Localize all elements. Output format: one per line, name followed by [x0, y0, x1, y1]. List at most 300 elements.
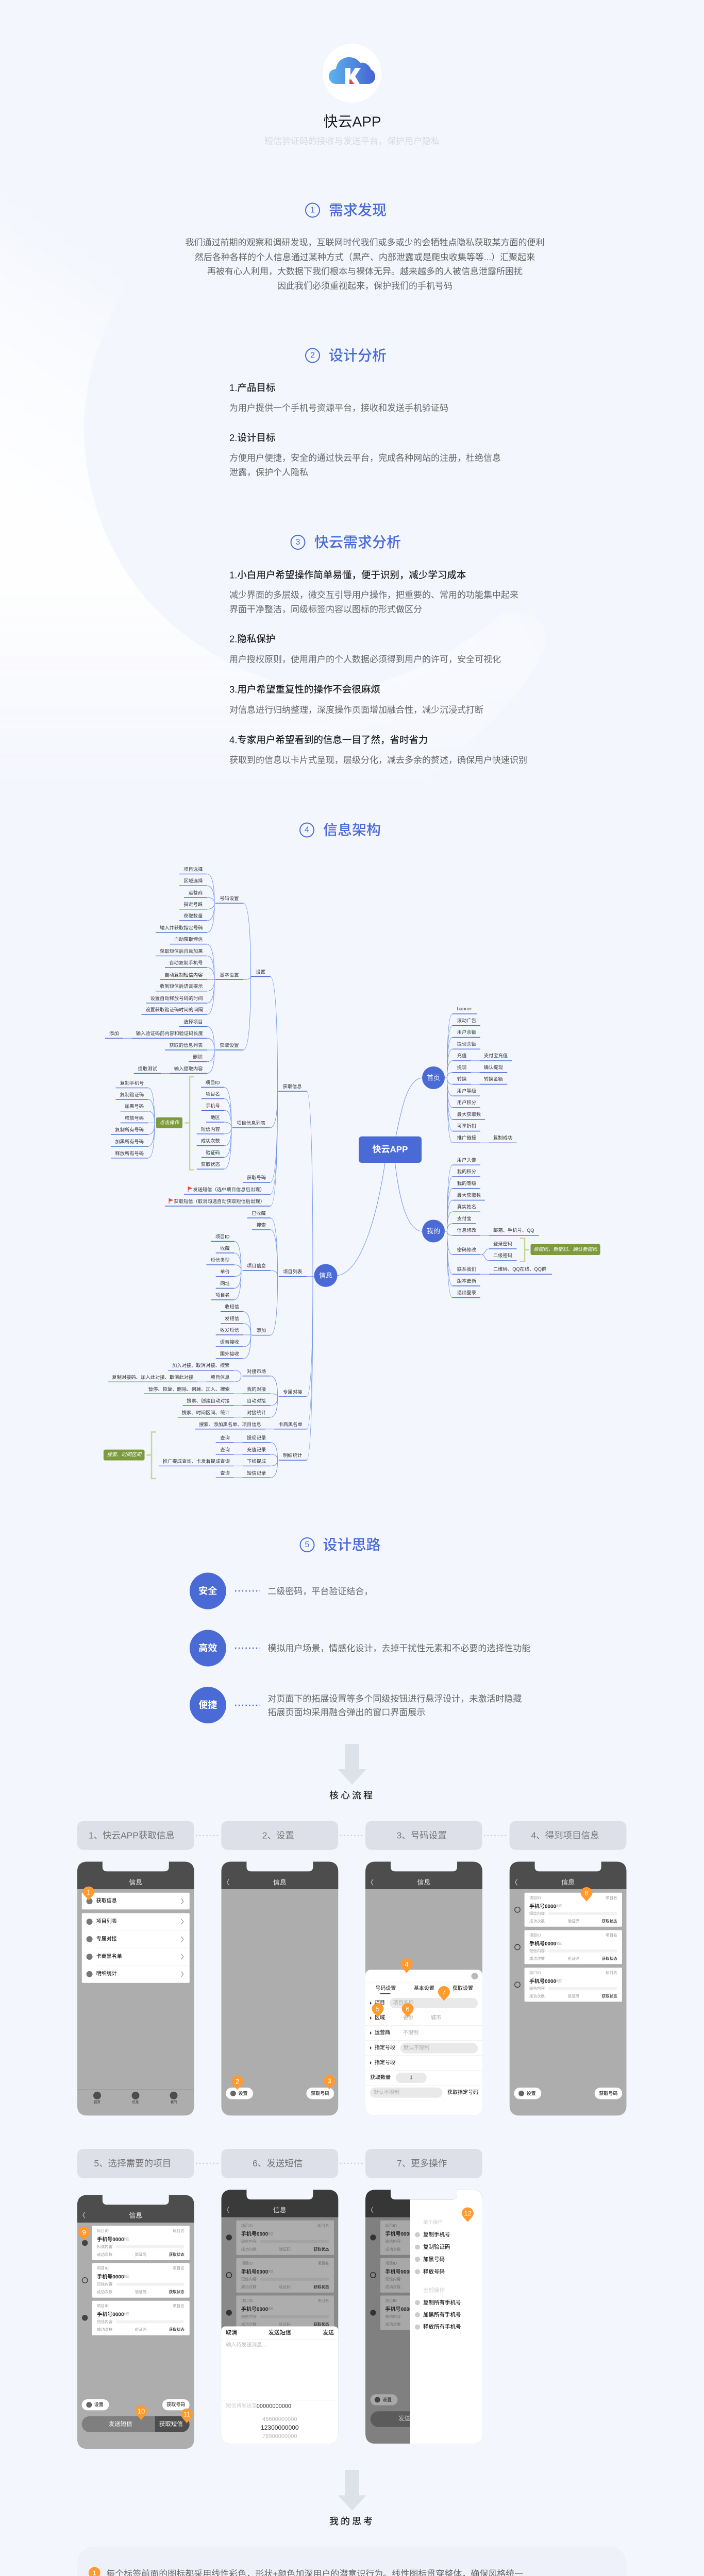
branch: 我的: 退出登录: [457, 1290, 476, 1295]
branch: 首页: 推广链接: [457, 1134, 476, 1140]
need 1: 减少界面的多层级，微交互引导用户操作，把重要的、常用的功能集中起来: [229, 590, 518, 600]
card 1: 手机号0000: [97, 2236, 124, 2243]
card 1: 验证码: [135, 2251, 147, 2257]
card 1: 项目名: [317, 2223, 329, 2228]
card 2: 验证码: [568, 1956, 580, 1961]
branch: 信息: 专属对接: [283, 1389, 302, 1395]
text: 设计目标: [229, 432, 501, 477]
phone 3: 号码设置: 项目: [375, 1999, 385, 2006]
card 2: [236, 2258, 334, 2293]
phone 3: 号码设置: 1: [410, 2075, 413, 2080]
card 2: 验证码: [135, 2289, 147, 2294]
send sheet: 00000000000: [257, 2403, 291, 2410]
section 5: 设计思路: [190, 1537, 530, 1723]
card 2: 成功次数: [385, 2284, 401, 2289]
card 1: 获取状态: [313, 2246, 329, 2251]
paragraph: 再被有心人利用，大数据下我们根本与裸体无异。越来越多的人被信息泄露所困扰: [207, 267, 523, 276]
sub branch: 设置: 获取数量: [183, 913, 203, 919]
sub branch: 项目列表: 项目ID: [215, 1234, 230, 1240]
marker 1: [82, 1887, 95, 1901]
sub branch: 项目列表: 发短信: [225, 1316, 239, 1321]
card 3: 手机号0000: [385, 2306, 412, 2312]
bracket and note: 原密码: [520, 1239, 600, 1261]
card 2: 成功次数: [529, 1956, 545, 1961]
branch: 我的: [422, 1157, 600, 1298]
sub branch: 明细统计: 推广提成查询、卡发着提成查询: [163, 1458, 230, 1464]
card 3: 成功次数: [385, 2321, 401, 2327]
side drawer: 加黑号码: [423, 2256, 445, 2262]
branch: 我的: 邮箱、手机号、QQ: [493, 1227, 534, 1233]
phone 1: 获取信息: 卡商黑名单: [96, 1953, 122, 1959]
sub branch: 设置: 自动复制手机号: [169, 960, 203, 965]
card 3: 短信内容:: [97, 2319, 113, 2324]
marker 1: 1: [87, 1889, 91, 1896]
sub branch: 明细统计: [104, 1432, 278, 1479]
branch: 首页: [422, 1006, 516, 1143]
sub branch: 项目列表: [206, 1210, 278, 1359]
phone 3: 号码设置: [365, 1861, 482, 2115]
card 1: [525, 1893, 622, 1927]
sub branch: 获取信息 children: 获取短信（取消勾选自动获取短信后出现）: [174, 1198, 265, 1204]
item: 高效: 高效: [198, 1642, 217, 1653]
marker 3: [324, 2075, 335, 2090]
sub branch: 明细统计: 查询: [220, 1470, 230, 1476]
card 3: 地区: [267, 2307, 273, 2311]
card 1: 短信内容:: [241, 2239, 258, 2244]
arrow: down to 核心流程: [338, 1744, 366, 1785]
sub branch: 设置: 设置自动释放号码的时间: [150, 995, 203, 1001]
section 3: 快云需求分析: [229, 534, 527, 765]
sub branch: 项目信息列表: 成功次数: [201, 1138, 221, 1144]
phone 1: 获取信息: [77, 1861, 194, 2115]
card 1: 成功次数: [385, 2246, 401, 2251]
branch: 我的: 我的积分: [457, 1168, 476, 1174]
phone 2: 设置: 设置: [238, 2091, 247, 2096]
sub branch: 专属对接 and 卡商黑名单: [108, 1363, 278, 1429]
branch: 首页: 用户积分: [457, 1099, 476, 1105]
item: 安全: [190, 1572, 373, 1609]
need 1: [229, 570, 518, 614]
phone 6: 发送短信: [221, 2190, 338, 2444]
card 1: 手机号0000: [241, 2231, 269, 2238]
sub branch: 专属对接 and 卡商黑名单: 项目信息: [210, 1374, 230, 1380]
item: 安全: 二级密码，平台验证结合，: [267, 1587, 373, 1596]
icon: cloud logo: [323, 44, 381, 103]
card 2: 项目ID: [385, 2261, 397, 2265]
flow steps row 2: [77, 2149, 482, 2178]
branch: 我的: 支付宝: [457, 1215, 472, 1221]
card 3: [236, 2296, 334, 2327]
step 1: 1、快云APP获取信息: [89, 1830, 175, 1840]
sub branch: 设置: 提取测试: [138, 1065, 157, 1072]
need 2: 用户授权原则，使用用户的个人数据必须得到用户的许可，安全可视化: [229, 654, 501, 665]
sub branch: 获取信息 children: [165, 977, 278, 1206]
section 1: 需求发现: [186, 202, 544, 291]
step 4: [510, 1821, 626, 1850]
card 2: 成功次数: [97, 2289, 113, 2294]
sub branch: 项目列表: 搜索: [256, 1222, 266, 1228]
step 5: [77, 2149, 194, 2178]
step 4: 4、得到项目信息: [531, 1830, 599, 1840]
sub branch: 项目信息列表: 释放号码: [125, 1115, 144, 1121]
sub branch: 项目列表: 项目信息: [247, 1263, 266, 1268]
card 3: 项目名: [606, 1970, 617, 1975]
flow steps row 1: [77, 1821, 626, 1850]
card 2: 手机号0000: [97, 2274, 124, 2280]
card 1: 短信内容:: [385, 2239, 402, 2244]
phone 3: 号码设置: 信息: [417, 1878, 431, 1886]
card 1: 手机号0000: [385, 2231, 412, 2238]
sub branch: 项目信息列表: 复制手机号: [120, 1080, 144, 1086]
marker 4: 4: [405, 1960, 409, 1968]
sub branch: 设置: 收到短信后语音提示: [160, 984, 203, 989]
side drawer: 单个操作: [423, 2219, 443, 2225]
card 1: 验证码: [279, 2246, 291, 2251]
card 3: 手机号0000: [529, 1978, 557, 1985]
sub branch: 项目列表: 网址: [220, 1281, 230, 1286]
card 3: 短信内容:: [385, 2314, 402, 2319]
branch: 我的: 真实姓名: [457, 1204, 476, 1210]
sub branch: 明细统计: 查询: [220, 1447, 230, 1452]
card 3: 项目ID: [529, 1970, 541, 1975]
step 5: 5、选择需要的项目: [94, 2158, 171, 2168]
phone 7: 更多操作: 发送短信: [398, 2415, 422, 2422]
card 3: 手机号0000: [97, 2311, 124, 2318]
sub branch: 项目信息列表: 加黑所有号码: [115, 1139, 144, 1144]
sub branch: 项目信息列表: 短信内容: [201, 1126, 220, 1132]
send sheet: 输入待发送消息...: [226, 2342, 266, 2348]
phone 4: 得到项目信息: 设置: [527, 2091, 536, 2096]
heading: 2: [310, 351, 315, 360]
heading: 核心流程: 核心流程: [329, 1790, 375, 1801]
marker 6: [402, 2003, 413, 2018]
item: 便捷: 对页面下的拓展设置等多个同级按钮进行悬浮设计，未激活时隐藏: [267, 1694, 522, 1704]
marker 8: 8: [584, 1889, 589, 1897]
sub branch: 项目信息列表: 释放所有号码: [115, 1150, 144, 1156]
phone 4: 得到项目信息: 信息: [561, 1878, 575, 1886]
phone 3: 号码设置: 默认不限制: [404, 2044, 429, 2051]
phone 1: 获取信息: 项目列表: [96, 1918, 117, 1924]
send sheet: [221, 2327, 338, 2444]
sub branch: 设置: 设置: [256, 970, 265, 975]
branch: 首页: 滚动广告: [457, 1018, 476, 1023]
sub branch: 专属对接 and 卡商黑名单: 我的对接: [247, 1386, 266, 1392]
sub branch: 项目列表: 收发短信: [220, 1327, 239, 1333]
sub branch: 设置: 输入提取内容: [174, 1065, 203, 1072]
card 2: 地区: [267, 2269, 273, 2274]
phone 3: 号码设置: 不限制: [403, 2029, 418, 2036]
step 6: 6、发送短信: [253, 2158, 303, 2168]
bracket and note: 原密码: 原密码、新密码、确认新密码: [533, 1246, 597, 1252]
phone 3: 号码设置: 省份: [403, 2014, 413, 2021]
sub branch: 设置: 自动获取短信: [174, 937, 203, 942]
card 1: 地区: [267, 2232, 273, 2236]
branch: 我的: 我的等级: [457, 1180, 476, 1186]
bracket and note: 搜索、时间区间: 搜索、时间区间: [107, 1452, 142, 1458]
sub branch: 项目信息列表: 项目ID: [206, 1080, 220, 1085]
sub branch: 设置: 指定号段: [183, 902, 203, 907]
sub branch: 项目信息列表: 复制验证码: [120, 1092, 144, 1097]
text: 产品目标: 1.产品目标: [229, 382, 275, 393]
send sheet: 取消: [226, 2329, 237, 2336]
step 2: [221, 1821, 338, 1850]
sub branch: 项目信息列表: 获取状态: [201, 1161, 220, 1167]
sub branch: 设置: 选择项目: [183, 1019, 203, 1024]
branch: 我的: 版本更新: [457, 1278, 476, 1283]
need 1: 界面干净整洁，同级标签内容以图标的形式做区分: [229, 605, 422, 614]
card 3: 短信内容:: [529, 1986, 546, 1991]
marker 12: [462, 2207, 474, 2223]
phone 5: 选择需要的项目: 信息: [129, 2211, 142, 2219]
heading: 需求发现: [329, 202, 387, 218]
marker 3: 3: [327, 2077, 331, 2084]
phone 3: 号码设置: 指定号段: [375, 2044, 395, 2050]
sub branch: 专属对接 and 卡商黑名单: 复制对接码、加入此对接、取消此对接: [112, 1374, 193, 1380]
sub branch: 项目信息列表: 项目信息列表: [237, 1120, 265, 1126]
marker 11: [181, 2409, 193, 2424]
sub branch: 专属对接 and 卡商黑名单: 搜索、时间区间、统计: [182, 1410, 230, 1415]
marker 11: 11: [183, 2410, 190, 2418]
sub branch: 设置: 获取设置: [220, 1043, 239, 1048]
sub branch: 项目列表: 添加: [257, 1328, 266, 1333]
phone 3: 号码设置: 区域: [375, 2014, 385, 2021]
branch: 我的: 最大获取数: [457, 1192, 481, 1198]
branch: 我的: 二级密码: [493, 1252, 512, 1258]
phone 1: 获取信息: 首页: [94, 2099, 101, 2104]
card 2: 成功次数: [241, 2284, 257, 2289]
card 3: 成功次数: [241, 2321, 257, 2327]
side drawer: 加黑所有手机号: [423, 2311, 461, 2318]
card 3: 项目名: [173, 2303, 185, 2308]
paragraph: 然后各种各样的个人信息通过某种方式（黑产、内部泄露或是爬虫收集等等...）汇聚起来: [195, 252, 535, 262]
arrow: down to 我的思考: [338, 2470, 366, 2511]
marker 2: 2: [236, 2077, 239, 2086]
step 3: [365, 1821, 482, 1850]
card 1: 项目ID: [529, 1895, 541, 1900]
item: 便捷: 便捷: [198, 1700, 217, 1710]
sub branch: 项目列表: 国外接收: [220, 1351, 239, 1357]
marker 9: [78, 2227, 90, 2241]
phone 4: 得到项目信息: [510, 1861, 627, 2115]
sub branch: 专属对接 and 卡商黑名单: 自动对接: [247, 1398, 266, 1403]
sub branch: 设置: 项目选择: [183, 866, 203, 872]
sub branch: 项目信息列表: 项目名: [206, 1091, 220, 1097]
marker 6: 6: [406, 2005, 410, 2013]
branch: 首页: 转换金额: [484, 1076, 504, 1082]
paragraph: 我们通过前期的观察和调研发现，互联网时代我们或多或少的会牺牲点隐私获取某方面的便利: [186, 238, 544, 247]
sub branch: 设置: 号码设置: [220, 896, 239, 901]
side drawer: 复制验证码: [423, 2244, 450, 2250]
phone 1: 获取信息: 明细统计: [96, 1970, 117, 1977]
marker 12: 12: [464, 2209, 472, 2217]
card 3: 项目ID: [385, 2298, 397, 2303]
card 3: 获取状态: [602, 1993, 617, 1998]
panel: 我的思考: [77, 2547, 626, 2576]
background swoosh shape: [0, 388, 182, 634]
sub branch: 设置: 运营商: [188, 890, 203, 895]
branch: 首页: 可享折扣: [457, 1123, 476, 1129]
phone 1: 获取信息: 获取信息: [96, 1897, 117, 1904]
branch: 首页: 首页: [427, 1074, 440, 1082]
side drawer: [410, 2190, 482, 2444]
sub branch: 明细统计: 提现记录: [247, 1435, 266, 1440]
card 1: 项目ID: [241, 2223, 253, 2228]
card 3: 地区: [123, 2312, 129, 2316]
bracket and note: 点击操作: 点击操作: [159, 1120, 180, 1126]
item: 安全: 安全: [198, 1585, 217, 1596]
send sheet: 短信将发送至: [226, 2402, 257, 2409]
send sheet: 发送短信: [269, 2329, 291, 2336]
sub branch: 项目信息列表: [111, 1077, 270, 1170]
branch: 我的: 信息修改: [457, 1227, 476, 1233]
phone 3: 号码设置: 项目名称: [393, 1999, 413, 2006]
sub branch: 项目列表: 短信类型: [210, 1257, 230, 1263]
sub branch: 明细统计: 下线提成: [247, 1458, 266, 1464]
text: 产品目标: [229, 382, 448, 413]
sub branch: 项目列表: 收藏: [220, 1245, 230, 1251]
sub branch: 项目信息列表: 验证码: [206, 1149, 220, 1155]
sub branch: 获取信息 children: 获取号码: [247, 1175, 266, 1180]
card 1: 短信内容:: [529, 1910, 546, 1916]
card 1: 项目名: [173, 2228, 185, 2233]
card 1: 成功次数: [97, 2251, 113, 2257]
sub branch: 项目信息列表: 加黑号码: [125, 1104, 144, 1109]
phone 3: 号码设置: 基本设置: [414, 1985, 434, 1991]
card 1: 验证码: [568, 1918, 580, 1923]
need 3: 3.用户希望重复性的操作不会很麻烦: [229, 684, 380, 694]
card 1: 手机号0000: [529, 1903, 557, 1909]
branch: 首页: 用户等级: [457, 1088, 476, 1093]
phone 2: 设置: 信息: [273, 1878, 287, 1886]
sub branch: 设置: 添加: [109, 1031, 119, 1036]
sub branch: 获取信息 children: 发送短信（选中项目信息后出现）: [193, 1187, 265, 1192]
subtitle: 短信验证码的接收与发送平台，保护用户隐私: [264, 136, 440, 146]
card 2: 项目名: [317, 2260, 329, 2265]
card 1: [92, 2226, 190, 2260]
section 4 heading: 信息架构: 信息架构: [323, 822, 381, 838]
heading: 设计分析: [329, 347, 387, 364]
phone 3: 号码设置: 获取设置: [452, 1985, 473, 1991]
branch: 首页: 确认提现: [484, 1064, 503, 1070]
need 4: [229, 735, 527, 765]
step 2: 2、设置: [262, 1830, 294, 1840]
card 2: [525, 1930, 622, 1964]
card 2: 项目ID: [97, 2266, 109, 2270]
side drawer: 释放号码: [423, 2268, 445, 2275]
phone 1: 获取信息: 信息: [132, 2099, 139, 2104]
branch: 信息: 卡商黑名单: [278, 1421, 303, 1427]
marker 10: [135, 2405, 147, 2420]
heading: 1: [310, 206, 315, 214]
sub branch: 设置: 自动复制短信内容: [164, 972, 203, 977]
card 3: 成功次数: [529, 1993, 545, 1998]
sub branch: 专属对接 and 卡商黑名单: 搜索、添加黑名单、项目信息: [199, 1421, 261, 1427]
paragraph: [186, 238, 544, 291]
need 4: 获取到的信息以卡片式呈现，层级分化，减去多余的赘述，确保用户快速识别: [229, 755, 527, 765]
phone 3: 号码设置: 运营商: [375, 2029, 390, 2036]
card 1: [236, 2221, 334, 2255]
heading: 5: [305, 1540, 310, 1549]
root node: [337, 1078, 422, 1276]
sub branch: 项目列表: 收短信: [225, 1304, 239, 1310]
card 2: 短信内容:: [241, 2276, 258, 2281]
phone 7: 更多操作: [365, 2190, 482, 2444]
item: 便捷: [190, 1687, 522, 1723]
card 3: 地区: [556, 1979, 562, 1983]
branch: 我的: 密码修改: [457, 1247, 476, 1252]
branch: 首页: 转换: [457, 1076, 466, 1082]
card 2: 地区: [556, 1941, 562, 1945]
card 2: 地区: [123, 2275, 129, 2279]
branch: 我的: 联系我们: [457, 1266, 476, 1272]
text: 产品目标: 为用户提供一个手机号资源平台，接收和发送手机验证码: [229, 403, 448, 413]
phone 5: 选择需要的项目: 发送短信: [109, 2420, 132, 2427]
branch: 首页: 最大获取数: [457, 1111, 481, 1117]
card 2: 验证码: [279, 2284, 291, 2289]
branch: 我的: 我的: [427, 1227, 440, 1235]
sub branch: 专属对接 and 卡商黑名单: 加入对接、取消对接、搜索: [172, 1363, 230, 1368]
sub branch: 项目列表: 已收藏: [252, 1210, 266, 1216]
step 1: [77, 1821, 194, 1850]
marker 8: [580, 1887, 593, 1902]
phone 5: 选择需要的项目: 设置: [94, 2402, 104, 2408]
need 3: [229, 684, 483, 715]
step 7: [365, 2149, 482, 2178]
branch: 首页: 提现余额: [457, 1041, 477, 1046]
card 1: [380, 2221, 410, 2255]
card 3: [525, 1968, 622, 2002]
card 1: 项目名: [606, 1895, 617, 1900]
phone 3: 号码设置: 默认不限制: [374, 2089, 399, 2095]
marker 5: [372, 2003, 383, 2018]
sub branch: 设置: 输入并获取指定号码: [160, 925, 203, 930]
need 4: 4.专家用户希望看到的信息一目了然，省时省力: [229, 735, 428, 745]
card 2: 项目ID: [529, 1933, 541, 1938]
send sheet: 发送: [323, 2329, 334, 2336]
sub branch: 项目列表: 语音接收: [220, 1339, 239, 1345]
paragraph: 因此我们必须重视起来，保护我们的手机号码: [277, 281, 452, 291]
sub branch: 项目信息列表: 手机号: [206, 1103, 220, 1108]
branch: 首页: 支付宝充值: [484, 1053, 508, 1058]
card 1: 项目ID: [385, 2223, 397, 2228]
sub branch: 专属对接 and 卡商黑名单: 搜索、创建自动对接: [187, 1398, 230, 1403]
card 2: 手机号0000: [529, 1940, 557, 1947]
card 2: 手机号0000: [241, 2268, 269, 2275]
sub branch: 设置: [105, 866, 270, 1074]
sub branch: 项目列表: 项目名: [215, 1292, 230, 1298]
sub branch: 设置: 获取的信息列表: [169, 1042, 203, 1048]
sub branch: 设置: 基本设置: [220, 972, 239, 977]
card 1: 成功次数: [529, 1918, 545, 1923]
root node: 快云APP: [373, 1145, 408, 1154]
branch: 信息: [104, 866, 337, 1479]
phone 3: 号码设置: 获取数量: [370, 2074, 391, 2080]
marker 7: [438, 1986, 450, 2001]
card 3: 获取状态: [169, 2327, 185, 2332]
card 2: 项目名: [173, 2265, 185, 2270]
card 3: 项目ID: [241, 2298, 253, 2303]
card 1: 地区: [556, 1904, 562, 1908]
sub branch: 项目信息列表: 地区: [210, 1114, 220, 1120]
header: [264, 44, 440, 146]
send sheet: 78900000000: [262, 2433, 297, 2439]
card 2: 获取状态: [313, 2284, 329, 2289]
card 2: [380, 2258, 410, 2293]
sub branch: 项目列表: 单价: [220, 1269, 230, 1275]
marker 4: [401, 1958, 412, 1973]
card 3: 验证码: [568, 1993, 580, 1998]
branch: 信息: 明细统计: [283, 1452, 302, 1458]
